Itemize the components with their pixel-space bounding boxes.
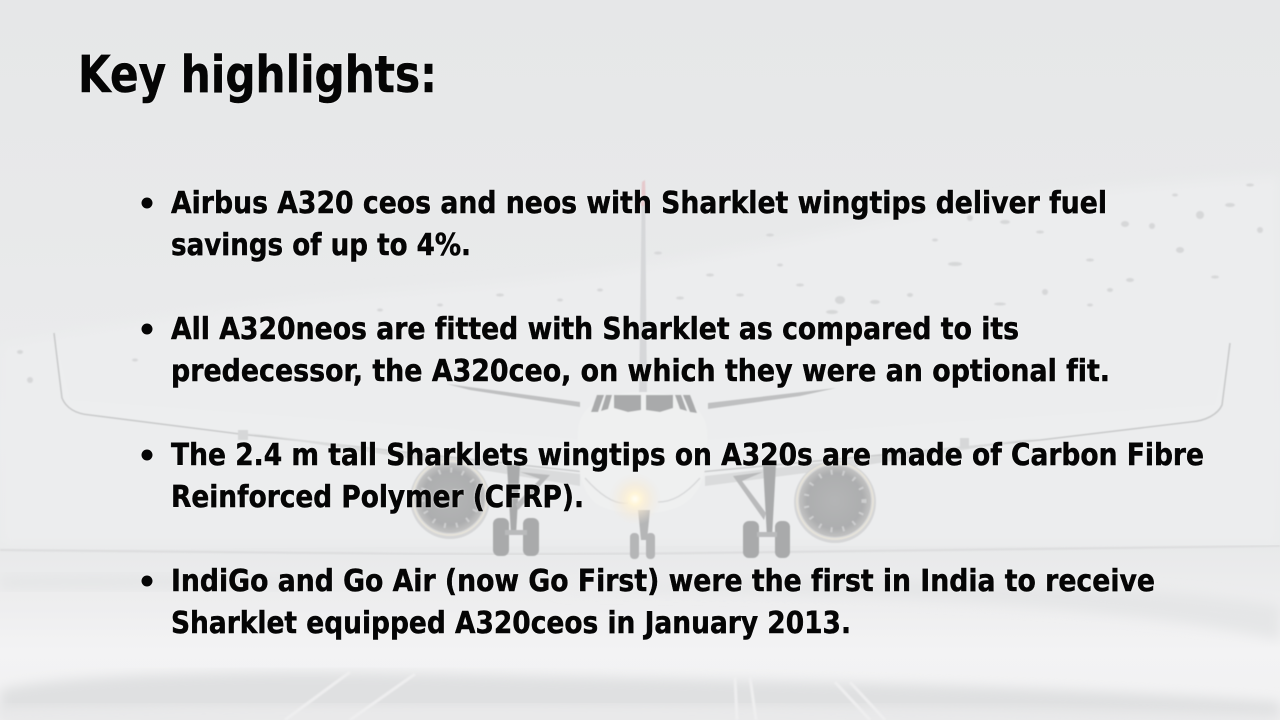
bullet: first in India: Sharklet equipped A320ceos in January 2013. [171,606,851,641]
left main landing gear [493,465,550,556]
aircraft [54,180,1230,559]
cockpit windows [591,395,697,413]
bullet: first in India [142,564,1155,641]
fuselage [578,392,707,514]
pylons [238,430,969,448]
tail fin [639,180,647,400]
bullet: carbon fibre [142,438,1204,515]
left engine [410,459,490,539]
bullet: fuel savings: savings of up to 4%. [171,228,471,263]
bullet: fuel savings: Airbus A320 ceos and neos with Sharklet wingtips deliver fuel [171,186,1107,221]
bullet: carbon fibre: Reinforced Polymer (CFRP). [171,480,584,515]
bullet list [142,186,1204,641]
snowy hillside [0,176,1280,545]
title: Key highlights: [78,46,437,105]
landing light [609,473,661,525]
nose landing gear [630,510,655,559]
right main landing gear [733,465,790,558]
right wing with sharklet [700,343,1230,478]
bullet: fuel savings [142,186,1107,263]
bullet: first in India: IndiGo and Go Air (now Go First) were the first in India to receive [171,564,1155,599]
horizontal stabilisers [447,384,580,407]
left wing with sharklet [54,333,590,478]
bullet: A320neo fit: All A320neos are fitted with Sharklet as compared to its [171,312,1019,347]
bullet: A320neo fit: predecessor, the A320ceo, on which they were an optional fit. [171,354,1110,389]
bullet: A320neo fit [142,312,1110,389]
snow-covered ground [0,546,1280,720]
right engine [794,461,876,543]
